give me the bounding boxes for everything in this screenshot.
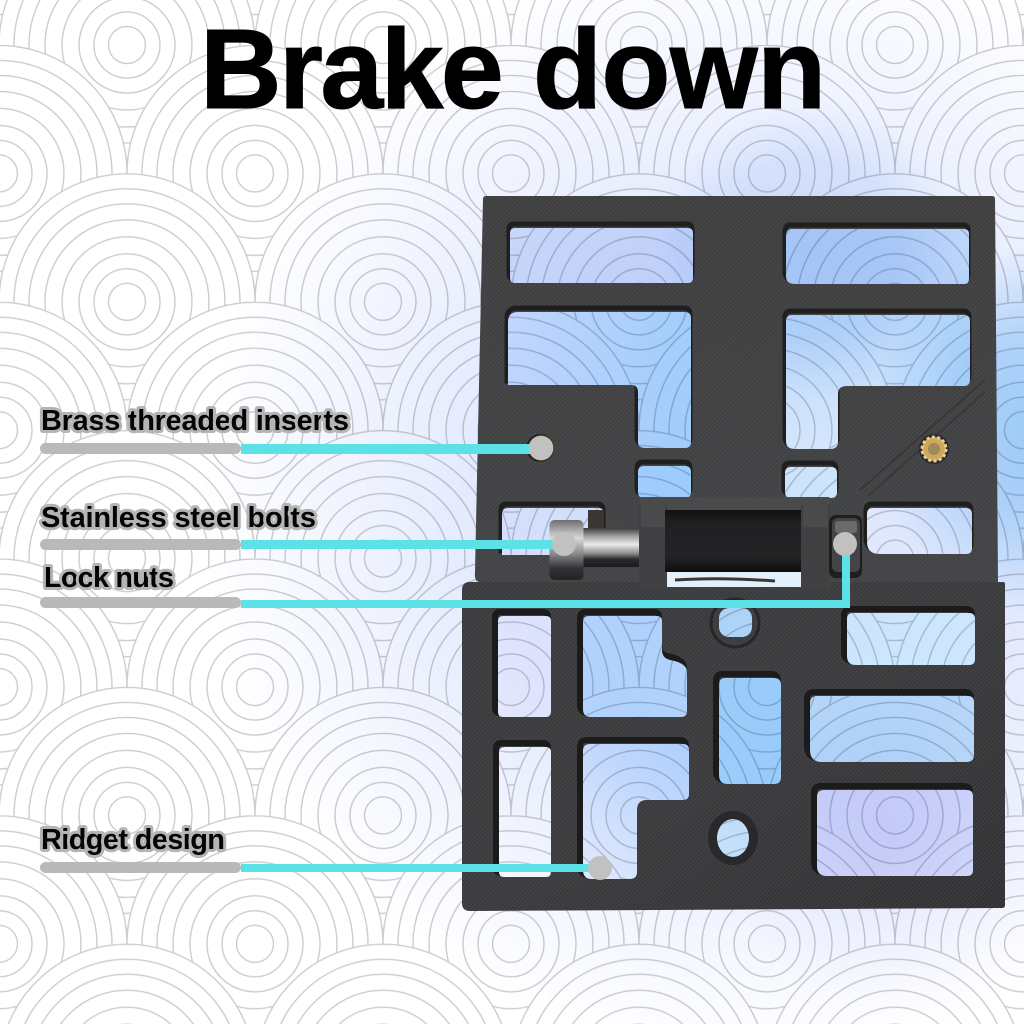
- stainless steel bolt: [550, 520, 639, 580]
- callout: ridget design: [40, 824, 612, 880]
- brass insert: right: [919, 434, 949, 464]
- callout: ridget design: Ridget design: [41, 824, 225, 856]
- upper plate: [475, 196, 998, 582]
- lower plate: [462, 568, 1005, 911]
- centre slot under hinge: [667, 570, 802, 587]
- title: Brake: [200, 6, 501, 132]
- hinge bracket: [639, 497, 830, 589]
- callout: brass threaded inserts: Brass threaded inserts: [41, 405, 349, 437]
- callout: lock nuts: [40, 532, 857, 608]
- title: down: [533, 6, 826, 132]
- callout: lock nuts: Lock nuts: [44, 562, 174, 594]
- brass insert: left (under marker): [526, 434, 554, 462]
- lock nut: [829, 515, 862, 578]
- shadowed corner of left bolt window: [588, 510, 604, 530]
- callout: stainless steel bolts: Stainless steel bolts: [41, 502, 316, 534]
- callout: stainless steel bolts: [40, 502, 576, 556]
- black hinge cylinder: [665, 510, 801, 572]
- callout: brass threaded inserts: [40, 405, 553, 460]
- window tints seen through the plate openings: [495, 223, 978, 882]
- photo: brake assembly: [462, 196, 1005, 911]
